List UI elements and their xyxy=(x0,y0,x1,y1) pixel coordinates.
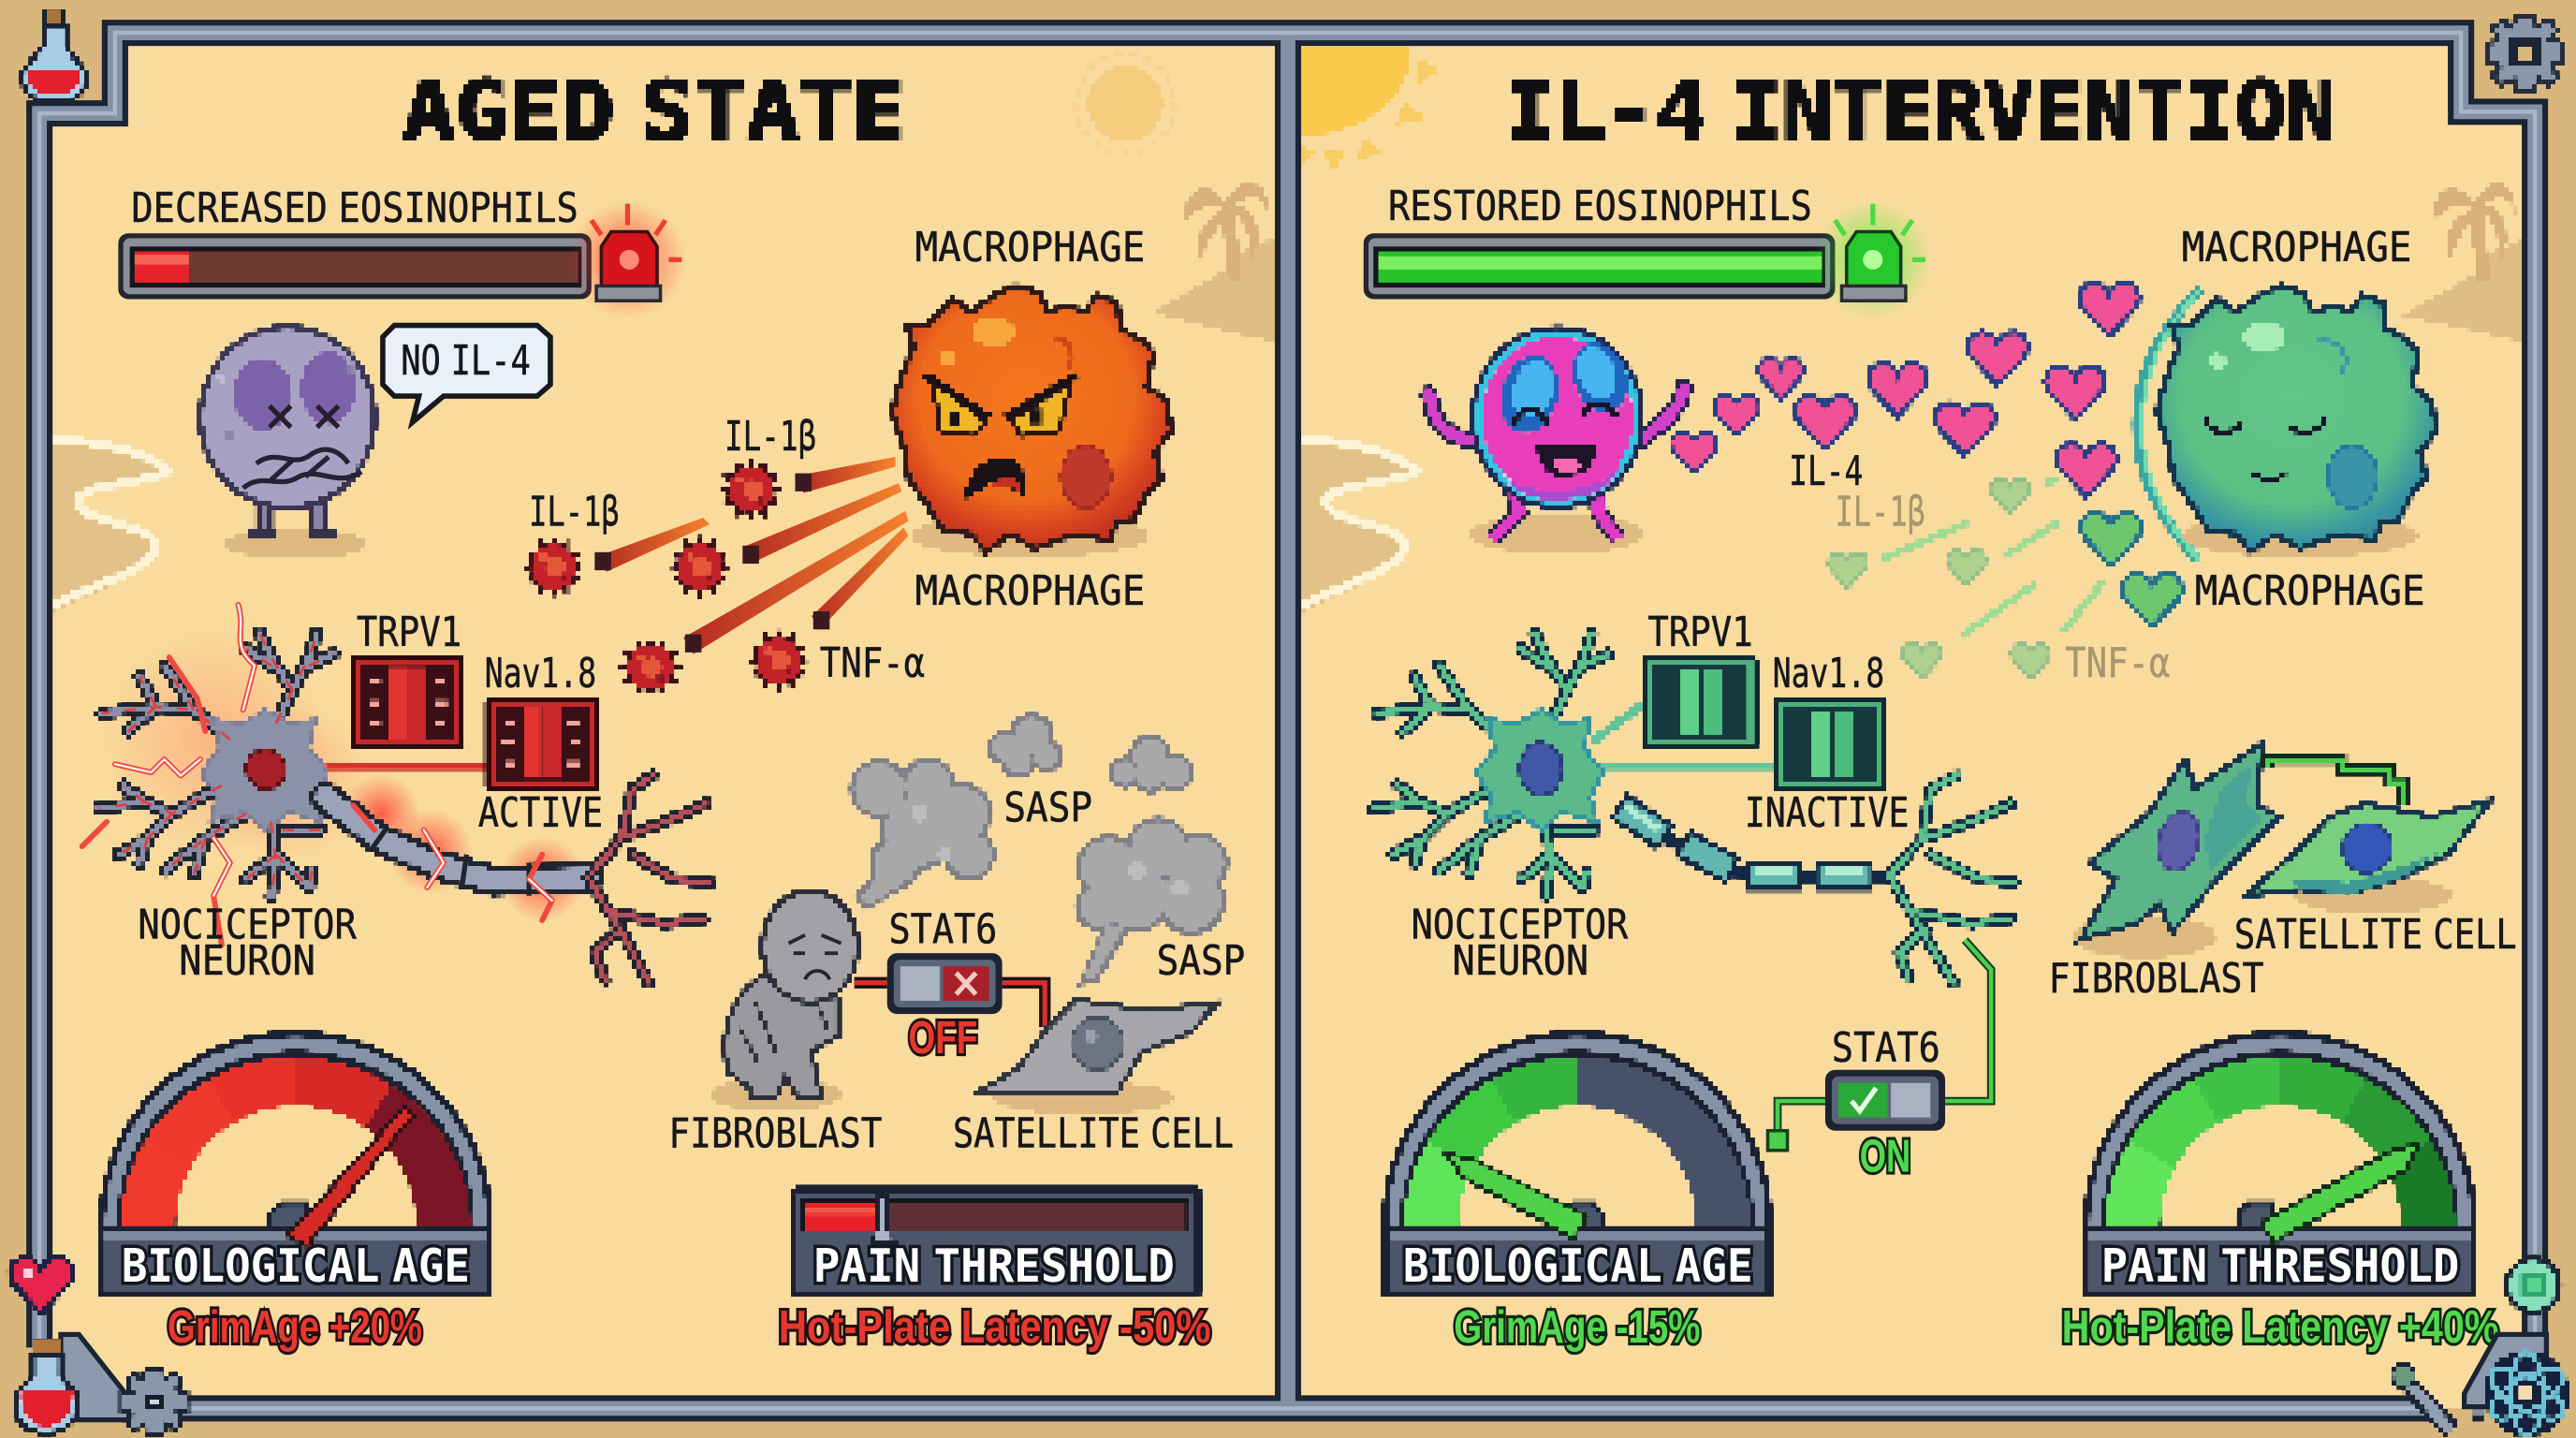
icon: red alarm light xyxy=(568,200,687,319)
label: satellite cell: SATELLITE CELL xyxy=(2234,911,2517,959)
icon: flask bottom-left xyxy=(15,1340,77,1433)
label: TRPV1: TRPV1 xyxy=(357,609,461,656)
label: faded TNF alpha: TNF-α xyxy=(2065,639,2170,687)
icon: atom xyxy=(2483,1351,2570,1436)
label: IL-1 beta lower: IL-1β xyxy=(529,489,620,536)
label: nociceptor neuron xyxy=(1412,901,1629,985)
eosinophil meter label: DECREASED EOSINOPHILS xyxy=(131,184,578,232)
scenery: bright sun xyxy=(1299,46,1439,174)
title: IL-4 INTERVENTION xyxy=(1505,64,2336,159)
label: faded IL-1 beta: IL-1β xyxy=(1835,489,1925,536)
label: TRPV1: TRPV1 xyxy=(1647,609,1753,656)
switch: STAT6 off xyxy=(855,953,1045,1027)
eosinophil meter: low xyxy=(118,233,592,299)
cytokine trails xyxy=(594,457,909,654)
label: ON: ON xyxy=(1860,1132,1910,1182)
channel: TRPV1 active xyxy=(350,655,465,749)
gauge label: BIOLOGICAL AGE xyxy=(1403,1239,1753,1293)
eosinophil meter label: RESTORED EOSINOPHILS xyxy=(1388,183,1812,230)
label: IL-1 beta upper: IL-1β xyxy=(724,413,816,461)
character: green satellite cell xyxy=(2246,800,2491,914)
label: macrophage bottom: MACROPHAGE xyxy=(2195,567,2425,615)
shield arc xyxy=(2137,289,2202,559)
icon: cytokines xyxy=(522,459,810,698)
character: happy eosinophil xyxy=(1429,326,1684,554)
label: nociceptor neuron: NOCICEPTOR xyxy=(138,901,357,948)
scenery: palm island xyxy=(2402,183,2524,342)
character: sad fibroblast xyxy=(710,890,857,1111)
label: STAT6 on: STAT6 xyxy=(1832,1024,1940,1072)
label: macrophage bottom: MACROPHAGE xyxy=(915,567,1145,615)
label: IL-4: IL-4 xyxy=(1789,448,1863,495)
icon: wrench xyxy=(2392,1364,2452,1430)
label: fibroblast: FIBROBLAST xyxy=(2049,955,2264,1003)
gauge label: BIOLOGICAL AGE xyxy=(122,1239,470,1293)
SASP smoke clouds xyxy=(849,713,1229,986)
speech text: NO IL-4 xyxy=(401,337,531,385)
scenery: beach xyxy=(1303,440,1416,611)
channel: Nav1.8 closed xyxy=(1773,697,1888,790)
eosinophil meter: full xyxy=(1364,233,1835,299)
gauge: pain threshold high xyxy=(2083,1031,2478,1299)
gauge: biological age low xyxy=(1382,1031,1773,1299)
panel: aged state xyxy=(39,33,1288,1408)
signal wire to STAT6 xyxy=(1767,940,1991,1151)
speech bubble xyxy=(383,326,550,422)
label: nociceptor neuron xyxy=(138,901,357,985)
label: Nav1.8: Nav1.8 xyxy=(485,650,596,697)
label: Nav1.8: Nav1.8 xyxy=(1773,650,1884,697)
channel: Nav1.8 active xyxy=(485,697,600,790)
scenery: beach xyxy=(52,440,168,611)
signal wire between cells xyxy=(2267,759,2404,805)
label: nociceptor neuron: NEURON xyxy=(1453,937,1588,985)
gauge: biological age high xyxy=(98,1031,493,1299)
icon: gear top-right xyxy=(2487,15,2563,91)
label: STAT6 off: STAT6 xyxy=(889,906,997,954)
icon: heart on frame xyxy=(9,1257,72,1313)
meter label: PAIN THRESHOLD xyxy=(813,1239,1175,1293)
character: grey satellite cell xyxy=(977,999,1218,1114)
channel: TRPV1 closed xyxy=(1643,655,1758,749)
scenery: faint sun xyxy=(1076,54,1175,153)
label: macrophage top: MACROPHAGE xyxy=(2182,224,2411,271)
label: macrophage top: MACROPHAGE xyxy=(915,224,1145,271)
icon: green gem on frame xyxy=(2507,1259,2559,1312)
switch: STAT6 on xyxy=(1825,1070,1945,1131)
panel: IL-4 intervention xyxy=(1288,33,2535,1408)
nociceptor neuron: active xyxy=(98,633,710,983)
label: satellite cell: SATELLITE CELL xyxy=(953,1109,1234,1157)
IL-4 hearts stream xyxy=(1671,283,2182,678)
label: inactive: INACTIVE xyxy=(1745,789,1909,837)
icon: flask top-left xyxy=(22,10,86,102)
nociceptor neuron: calm xyxy=(1373,633,2014,983)
scenery: palm island xyxy=(1153,183,1277,342)
glow around active neuron xyxy=(98,624,585,922)
label: active: ACTIVE xyxy=(478,789,603,837)
icon: green alarm light xyxy=(1814,200,1932,319)
stat: GrimAge -15%: GrimAge -15% xyxy=(1454,1302,1701,1353)
character: calm macrophage xyxy=(2157,286,2437,557)
icon: gear bottom-left xyxy=(122,1369,187,1434)
stat: GrimAge +20%: GrimAge +20% xyxy=(168,1302,422,1353)
stat: hot-plate latency -50%: Hot-Plate Latency -50% xyxy=(779,1302,1211,1353)
character: sad eosinophil xyxy=(200,327,374,559)
label: fibroblast: FIBROBLAST xyxy=(668,1109,882,1157)
label: SASP upper: SASP xyxy=(1003,785,1092,832)
label: TNF alpha: TNF-α xyxy=(820,639,925,687)
gauge label: PAIN THRESHOLD xyxy=(2101,1239,2459,1293)
character: green fibroblast xyxy=(2071,742,2278,958)
character: angry macrophage xyxy=(892,286,1171,557)
meter: pain threshold low xyxy=(790,1186,1201,1299)
label: nociceptor neuron: NOCICEPTOR xyxy=(1412,901,1629,948)
stat: hot-plate latency +40%: Hot-Plate Latency +40% xyxy=(2062,1302,2499,1353)
title: AGED STATE xyxy=(402,64,905,159)
label: OFF: OFF xyxy=(909,1013,977,1064)
label: nociceptor neuron: NEURON xyxy=(179,937,315,985)
label: SASP lower: SASP xyxy=(1157,937,1245,985)
lightning sparks xyxy=(82,605,552,945)
